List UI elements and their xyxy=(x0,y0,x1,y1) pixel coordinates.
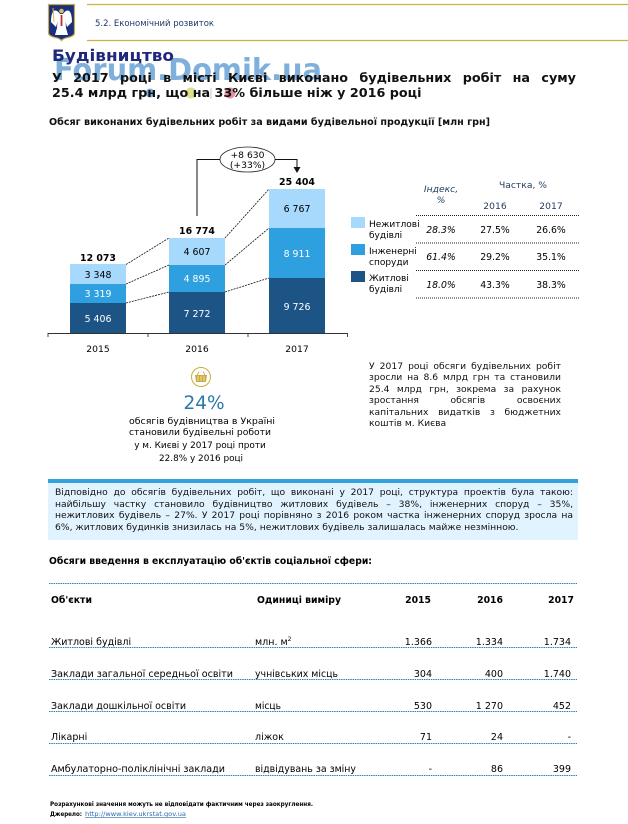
footnote: Розрахункові значення можуть не відповідати фактичним через заокруглення. xyxy=(50,800,313,808)
legend: Інженерні xyxy=(369,247,417,257)
growth callout xyxy=(220,147,275,172)
table values: 26.6% xyxy=(536,225,566,236)
row: preschools xyxy=(51,701,571,712)
row: housing: млн. м xyxy=(255,637,288,648)
legend: будівлі xyxy=(369,285,402,295)
table column headers xyxy=(424,180,563,212)
legend xyxy=(351,217,420,295)
row: outpatient clinics: - xyxy=(429,764,432,775)
growth callout: (+33%) xyxy=(230,160,265,171)
table values: 27.5% xyxy=(480,225,510,236)
row: outpatient clinics: відвідувань за зміну xyxy=(255,764,356,775)
headline: У 2017 році в місті Києві виконано будівельних робіт на суму xyxy=(52,71,576,86)
bar 2015: 3 319 xyxy=(85,289,111,300)
bar 2017: 6 767 xyxy=(284,204,310,215)
social facilities heading: Обсяги введення в експлуатацію об'єктів соціальної сфери: xyxy=(49,555,372,567)
year labels: 2017 xyxy=(285,344,309,355)
row: housing: 1.334 xyxy=(476,637,503,648)
growth arrow xyxy=(197,160,300,216)
header rules xyxy=(87,4,628,40)
row: outpatient clinics: 399 xyxy=(553,764,571,775)
callout text: найбільшу частку становило будівництво житлових будівель – 38%, інженерних споруд – 35%, xyxy=(55,499,573,510)
share table xyxy=(351,180,579,298)
table values xyxy=(426,225,566,291)
row: preschools: 452 xyxy=(553,701,571,712)
icon: gold basket xyxy=(192,368,210,386)
headline: 25.4 млрд грн, що на 33% більше ніж у 2016 році xyxy=(52,86,422,100)
row: preschools: 1 270 xyxy=(476,701,503,712)
axis xyxy=(48,334,348,337)
row: preschools: місць xyxy=(255,701,281,712)
row: outpatient clinics: 86 xyxy=(491,764,503,775)
row: hospitals: - xyxy=(568,732,571,743)
chart heading: Обсяг виконаних будівельних робіт за видами будівельної продукції [млн грн] xyxy=(49,117,490,128)
bar 2016: 4 607 xyxy=(184,247,210,258)
bar 2015 xyxy=(70,253,126,333)
year labels: 2016 xyxy=(185,344,209,355)
header row: Об'єкти xyxy=(51,595,92,606)
callout text: 6%, житлових будинків знизилась на 5%, нежитлових будівель залишалась майже незмінною. xyxy=(55,522,518,533)
table column headers: 2017 xyxy=(539,201,563,212)
legend: Нежитлові xyxy=(369,220,420,230)
table values: 38.3% xyxy=(536,280,566,291)
table values: 61.4% xyxy=(426,252,456,263)
statistic caption: у м. Києві у 2017 році проти xyxy=(134,441,266,451)
text: growth commentary: капітальних видатків з бюджетних xyxy=(369,407,561,418)
text: growth commentary: зростання обсягів освоєних xyxy=(369,395,561,406)
row: housing: 2 xyxy=(288,636,292,643)
bar 2016: 4 895 xyxy=(184,274,210,285)
growth callout: +8 630 xyxy=(230,150,265,161)
legend: споруди xyxy=(369,258,409,268)
text: growth commentary: У 2017 році обсяги будівельних робіт xyxy=(369,361,561,372)
statistic 24%: 24% xyxy=(183,393,225,414)
row: outpatient clinics xyxy=(51,764,571,775)
table rules xyxy=(416,216,579,298)
table column headers: Індекс, xyxy=(424,184,458,195)
bar 2017: 9 726 xyxy=(284,302,310,313)
row: housing xyxy=(51,636,571,648)
table column headers: Частка, % xyxy=(499,180,547,191)
source line: http://www.kiev.ukrstat.gov.ua xyxy=(85,810,186,818)
year labels xyxy=(86,344,309,355)
table rules xyxy=(49,584,577,776)
callout text: нежитлових будівель – 27%. У 2017 році порівняно з 2016 роком частка інженерних споруд зросла на xyxy=(55,510,573,521)
title: Будівництво xyxy=(52,46,174,65)
callout panel background xyxy=(48,479,578,540)
table column headers: % xyxy=(437,195,445,206)
row: schools: 400 xyxy=(485,669,503,680)
row: housing: 1.734 xyxy=(544,637,571,648)
row: schools: Заклади загальної середньої освіти xyxy=(51,669,233,680)
bar 2017 xyxy=(269,177,325,333)
row: housing: Житлові будівлі xyxy=(51,637,131,648)
text: growth commentary: зросли на 8.6 млрд грн та становили xyxy=(369,372,561,383)
year labels: 2015 xyxy=(86,344,110,355)
text: growth commentary: 25.4 млрд грн, зокрема за рахунок xyxy=(369,384,561,395)
header row xyxy=(51,595,574,606)
row: schools: 1.740 xyxy=(544,669,571,680)
row: schools xyxy=(51,669,571,680)
header row: 2015 xyxy=(405,595,431,606)
facilities table xyxy=(49,584,577,776)
callout text xyxy=(55,487,573,533)
stacked bar chart xyxy=(48,147,348,355)
callout text: Відповідно до обсягів будівельних робіт, що виконані у 2017 році, структура проектів була такою: xyxy=(55,487,573,498)
row: schools: 304 xyxy=(414,669,432,680)
table values: 29.2% xyxy=(480,252,510,263)
text: growth commentary xyxy=(369,361,561,429)
header row: 2017 xyxy=(548,595,574,606)
row: hospitals: Лікарні xyxy=(51,732,87,743)
text: growth commentary: коштів м. Києва xyxy=(369,418,446,429)
bar 2017: 25 404 xyxy=(279,177,315,188)
watermark: Forum.Domik.ua xyxy=(54,53,322,88)
table values: 35.1% xyxy=(536,252,566,263)
bar 2015: 3 348 xyxy=(85,270,111,281)
row: hospitals: 71 xyxy=(420,732,432,743)
table values: 43.3% xyxy=(480,280,510,291)
table values: 28.3% xyxy=(426,225,456,236)
bar 2016: 16 774 xyxy=(179,226,215,237)
table values: 18.0% xyxy=(426,280,456,291)
row: housing: 1.366 xyxy=(405,637,432,648)
headline xyxy=(52,71,576,100)
watermark dots xyxy=(146,88,236,99)
header row: Одиниці виміру xyxy=(257,595,341,606)
row: schools: учнівських місць xyxy=(255,669,338,680)
source line: Джерело: xyxy=(50,810,82,818)
row: hospitals xyxy=(51,732,571,743)
bar 2016: 7 272 xyxy=(184,309,210,320)
row: outpatient clinics: Амбулаторно-поліклінічні заклади xyxy=(51,764,225,775)
section label: 5.2. Економічний розвиток xyxy=(95,18,214,28)
legend: Житлові xyxy=(369,274,409,284)
statistic caption: становили будівельні роботи xyxy=(129,428,271,438)
bar 2015: 12 073 xyxy=(80,253,116,264)
header row: 2016 xyxy=(477,595,503,606)
bar 2015: 5 406 xyxy=(85,314,111,325)
statistic caption xyxy=(129,417,275,464)
bar 2017: 8 911 xyxy=(284,249,310,260)
row: hospitals: 24 xyxy=(491,732,503,743)
row: preschools: 530 xyxy=(414,701,432,712)
legend: будівлі xyxy=(369,231,402,241)
statistic caption: обсягів будівництва в Україні xyxy=(129,417,275,427)
row: hospitals: ліжок xyxy=(255,732,284,743)
statistic caption: 22.8% у 2016 році xyxy=(159,454,243,464)
table column headers: 2016 xyxy=(483,201,507,212)
row: preschools: Заклади дошкільної освіти xyxy=(51,701,186,712)
bar 2016 xyxy=(169,226,225,333)
connector lines xyxy=(126,189,269,303)
icon: Kyiv coat of arms xyxy=(48,4,74,40)
